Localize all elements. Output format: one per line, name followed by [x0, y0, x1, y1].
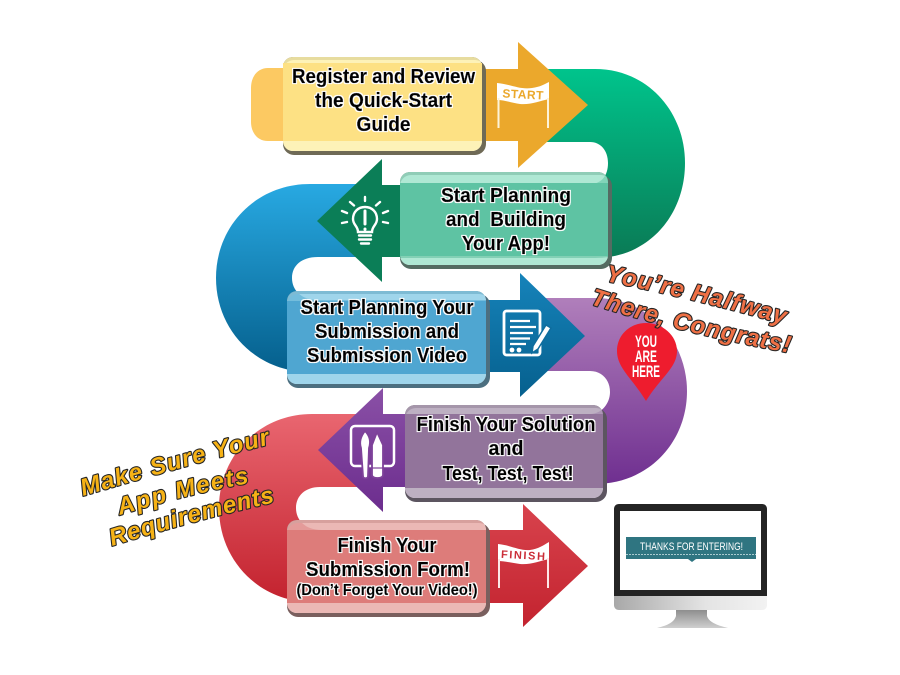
band: red curve — [219, 414, 530, 602]
band: purple curve — [400, 298, 687, 484]
step text: finish solution: Finish Your Solution — [416, 414, 596, 436]
step text: submission and video: Submission Video — [307, 345, 467, 367]
box: submission form — [287, 520, 490, 617]
callout: halfway: There, Congrats! — [592, 288, 794, 354]
arrow: brush — [318, 388, 420, 512]
icon: brush and pencil — [351, 426, 394, 478]
monitor banner — [626, 537, 756, 562]
monitor chin — [614, 596, 767, 610]
step text: finish solution: Test, Test, Test! — [442, 463, 574, 485]
step text: submission form — [296, 535, 478, 599]
step text: submission and video — [300, 297, 474, 367]
callout: requirements: Make Sure Your — [80, 430, 270, 497]
pin: you are here: HERE — [632, 362, 660, 381]
icon: finish flag — [498, 542, 549, 588]
step text: planning and building — [441, 185, 571, 255]
step text: submission form: Submission Form! — [306, 559, 470, 581]
step text: register — [292, 66, 475, 136]
callout: requirements: App Meets — [118, 470, 248, 516]
callout: requirements — [80, 430, 274, 547]
arrow: lightbulb — [317, 159, 420, 282]
step text: register: the Quick-Start — [315, 90, 452, 112]
step text: submission and video: Start Planning Your — [300, 297, 474, 319]
box: planning and building — [400, 172, 612, 269]
step text: submission and video: Submission and — [315, 321, 459, 343]
band: green curve — [400, 69, 685, 258]
band: blue curve — [216, 184, 525, 372]
monitor stand — [657, 610, 728, 628]
pin: you are here: YOU — [635, 332, 657, 351]
step text: submission form: (Don’t Forget Your Video!) — [296, 582, 478, 599]
step text: submission form: Finish Your — [338, 535, 437, 557]
monitor — [614, 504, 767, 628]
band: yellow tail — [251, 68, 300, 141]
box: submission and video — [287, 291, 490, 388]
step text: planning and building: Your App! — [462, 233, 550, 255]
arrow: start — [470, 42, 588, 168]
step text: planning and building: Start Planning — [441, 185, 571, 207]
arrow: document — [470, 273, 585, 397]
step text: finish solution: and — [488, 438, 524, 460]
step text: register: Guide — [356, 114, 410, 136]
pin: you are here — [617, 323, 677, 401]
monitor screen — [620, 511, 761, 590]
callout: halfway: You’re Halfway — [608, 264, 790, 327]
monitor bezel — [614, 504, 767, 596]
box: finish solution — [405, 405, 607, 502]
box: register — [283, 57, 486, 155]
step text: planning and building: and Building — [446, 209, 566, 231]
pin: you are here: ARE — [635, 347, 657, 366]
icon: document and pen — [504, 311, 551, 355]
icon: finish flag: FINISH — [501, 549, 545, 563]
arrow: finish — [470, 504, 588, 627]
step text: register: Register and Review — [292, 66, 475, 88]
icon: start flag: START — [502, 86, 544, 103]
icon: start flag — [497, 82, 549, 128]
step text: finish solution — [416, 414, 596, 485]
icon: lightbulb — [342, 197, 388, 244]
monitor banner: THANKS FOR ENTERING! — [640, 541, 743, 553]
callout: requirements: Requirements — [110, 489, 274, 547]
